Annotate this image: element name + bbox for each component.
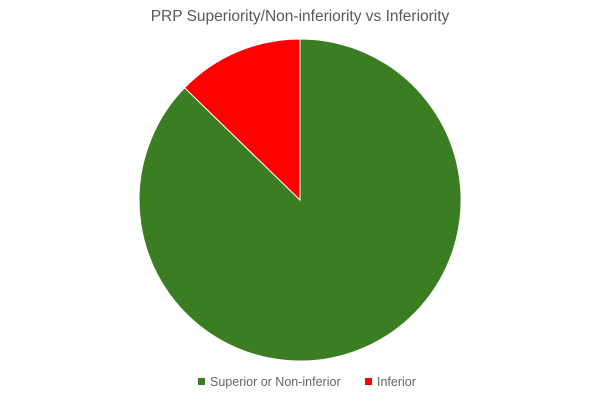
title: PRP Superiority/Non-inferiority vs Inferiority <box>151 8 449 25</box>
slice: superior or non-inferior <box>139 39 461 361</box>
legend item: superior or non-inferior: Superior or Non-inferior <box>210 375 341 389</box>
legend item: inferior: Inferior <box>377 375 416 389</box>
legend <box>198 375 416 389</box>
slice: inferior <box>185 39 300 200</box>
